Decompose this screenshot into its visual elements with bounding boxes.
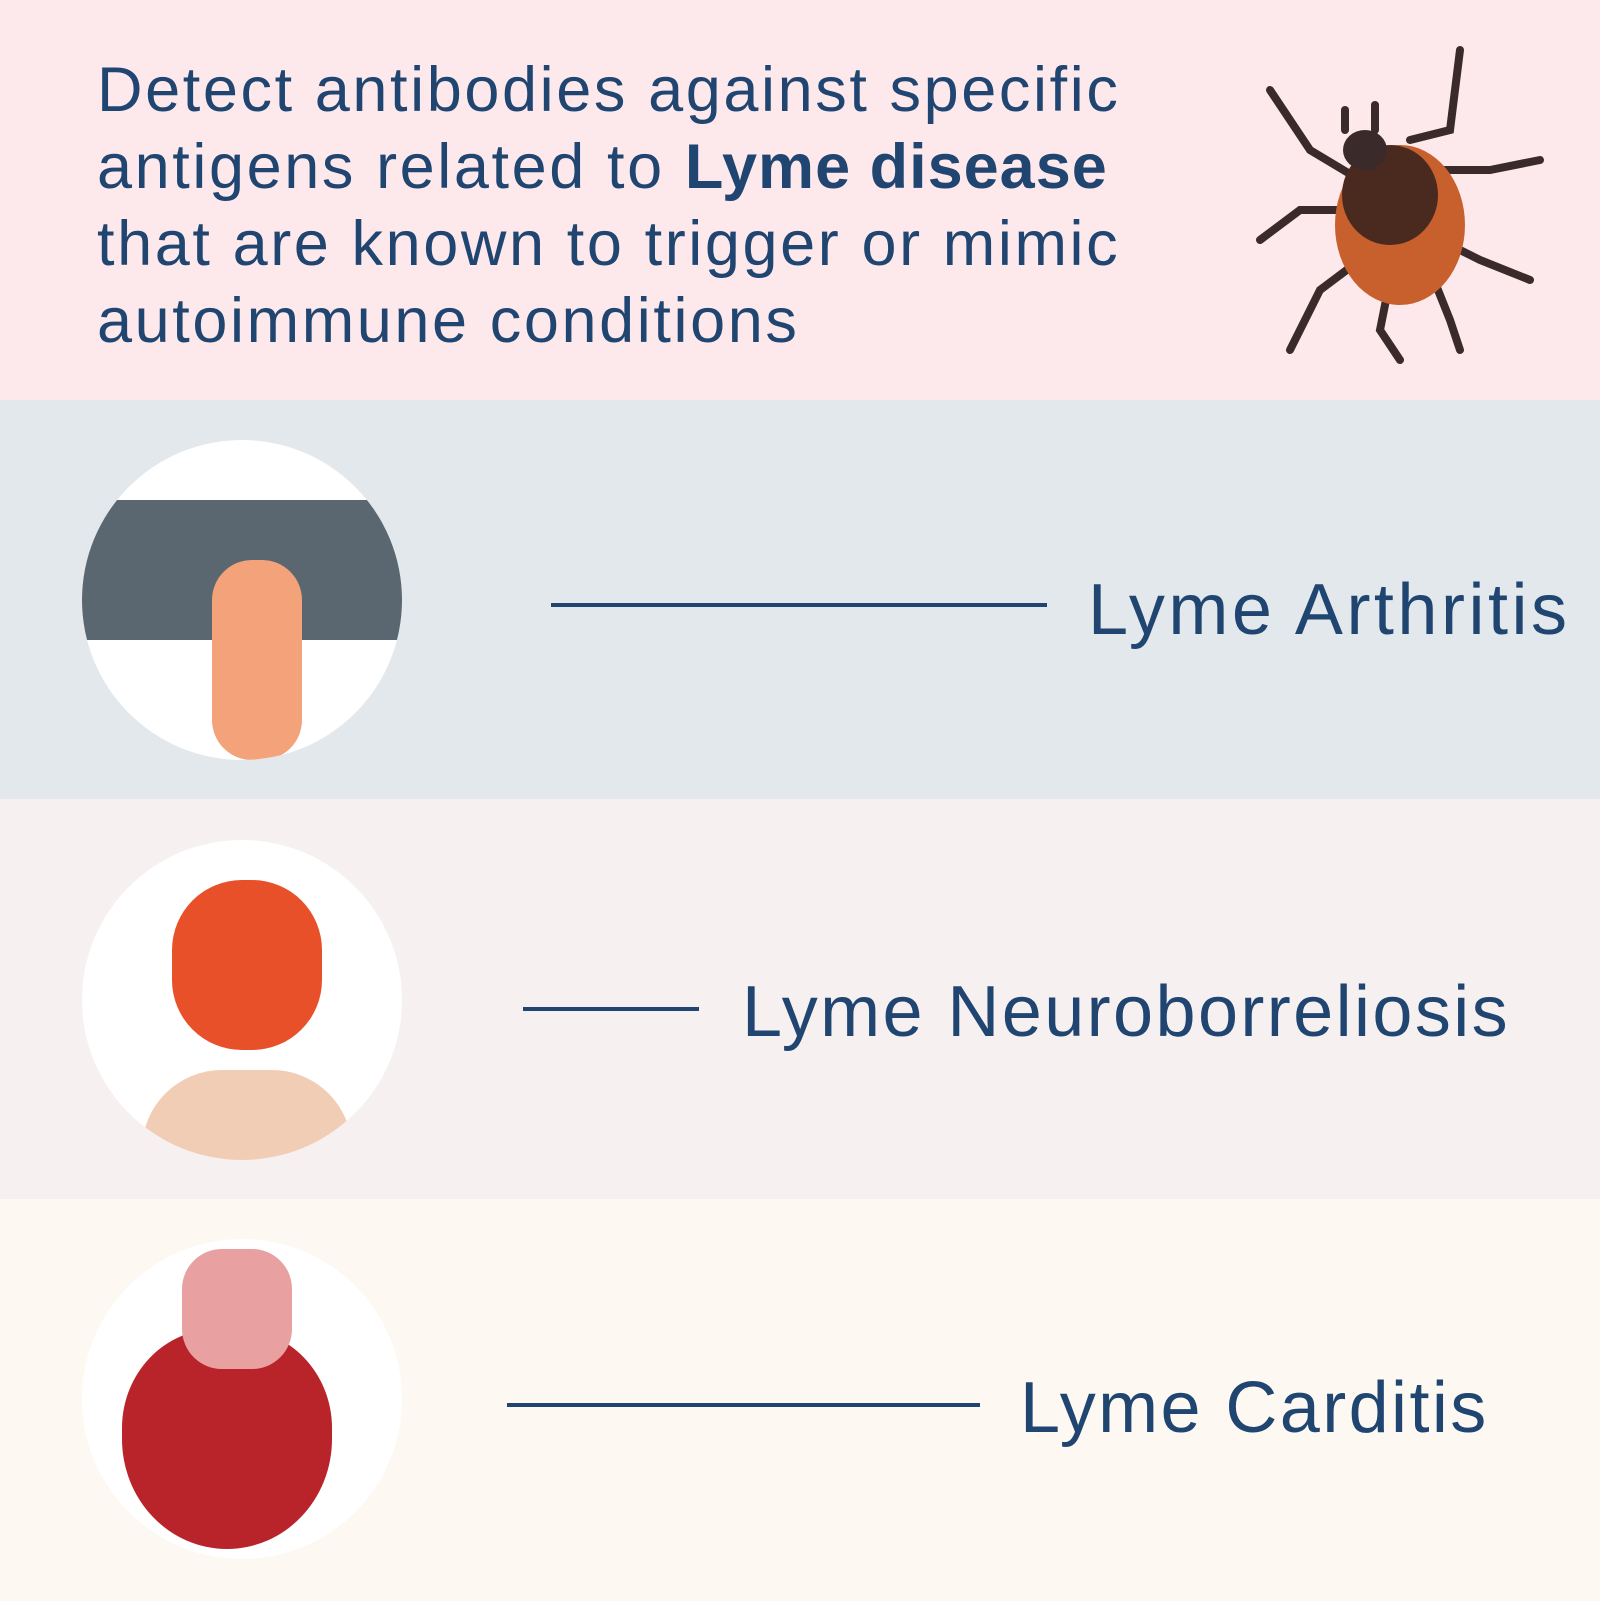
header panel [0, 0, 1600, 400]
header text [97, 55, 1120, 356]
label: Lyme Neuroborreliosis [742, 972, 1510, 1052]
header text: antigens related to Lyme disease [97, 132, 1108, 202]
panel: Lyme Carditis [0, 1199, 1600, 1601]
header text: Detect antibodies against specific [97, 55, 1120, 125]
image: knee [82, 440, 402, 760]
label: Lyme Arthritis [1088, 570, 1570, 650]
header text: autoimmune conditions [97, 286, 799, 356]
panel: Lyme Arthritis [0, 400, 1600, 799]
image: head [82, 840, 402, 1160]
icon: tick [1256, 46, 1544, 364]
header text: that are known to trigger or mimic [97, 209, 1120, 279]
label: Lyme Carditis [1020, 1368, 1489, 1448]
image: heart [82, 1239, 402, 1559]
panel: Lyme Neuroborreliosis [0, 799, 1600, 1199]
